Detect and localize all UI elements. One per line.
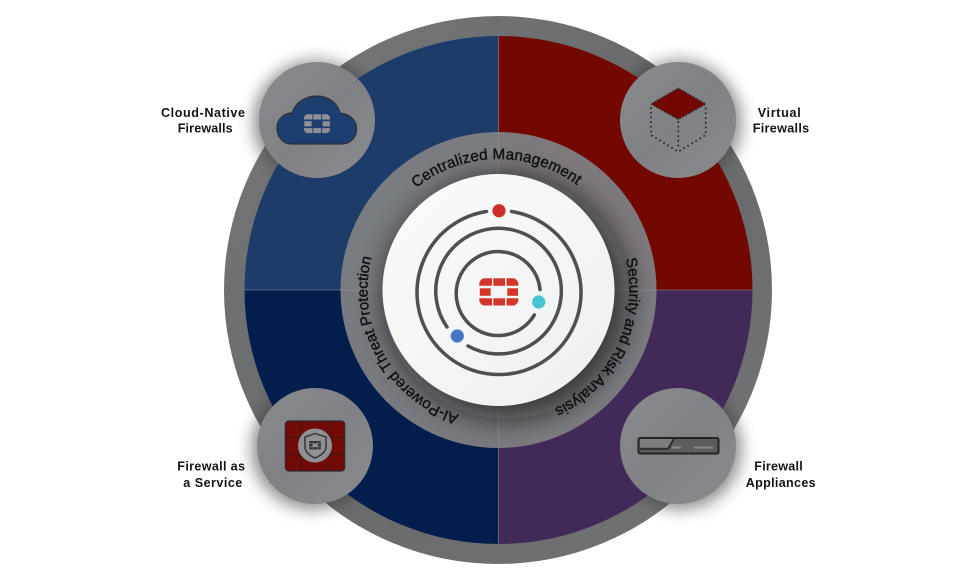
disc shadows on ring	[254, 59, 739, 507]
icon: cloud logo	[304, 114, 330, 133]
icon: shield logo	[309, 441, 321, 449]
icon: cloud	[277, 96, 356, 144]
dot: blue	[451, 329, 464, 343]
ring label: Security and Risk Analysis: Security and Risk Analysis	[555, 258, 640, 415]
label: Firewall Appliances: Firewall	[754, 460, 803, 474]
dot: red	[492, 204, 506, 217]
label: Firewall as a Service: Firewall as	[177, 460, 245, 474]
icon disc: cloud-native	[259, 62, 375, 178]
icon disc: virtual	[620, 62, 736, 178]
panel: virtual quadrant	[498, 36, 752, 290]
panel: four colored quadrants	[244, 36, 752, 544]
icon: Fortinet logo red	[479, 278, 518, 306]
label: Cloud-Native Firewalls: Cloud-Native	[161, 106, 245, 120]
icon: brick wall	[285, 421, 345, 471]
label: Firewall as a Service	[177, 460, 245, 490]
label: Cloud-Native Firewalls	[161, 106, 245, 136]
label: Cloud-Native Firewalls: Firewalls	[178, 122, 233, 136]
icon disc: firewall as a service	[257, 388, 373, 504]
label: Firewall Appliances	[746, 460, 816, 490]
panel: cloud-native quadrant	[244, 36, 498, 290]
orbit rings with dots	[417, 212, 581, 375]
label: Virtual Firewalls	[753, 106, 809, 136]
panel: firewall as a service quadrant	[244, 290, 498, 544]
center white disc	[382, 174, 614, 406]
panel: appliances quadrant	[498, 290, 752, 544]
icon: shield	[305, 434, 326, 458]
label: Firewall Appliances: Appliances	[746, 476, 816, 490]
outer ring	[224, 16, 772, 564]
icon: cube	[651, 88, 706, 152]
label: Firewall as a Service: a Service	[183, 476, 242, 490]
label: Virtual Firewalls: Virtual	[758, 106, 801, 120]
icon disc: appliances	[620, 388, 736, 504]
ring label: Centralized Management: Centralized Management	[412, 148, 582, 186]
panel: middle ring	[340, 132, 656, 448]
ring label: AI-Powered Threat Protection: AI-Powered Threat Protection	[357, 256, 460, 424]
dot: teal	[532, 295, 545, 309]
label: Virtual Firewalls: Firewalls	[753, 122, 809, 136]
soft shadows of icon discs on the page	[251, 66, 742, 510]
icon: firewall appliance	[638, 438, 718, 454]
